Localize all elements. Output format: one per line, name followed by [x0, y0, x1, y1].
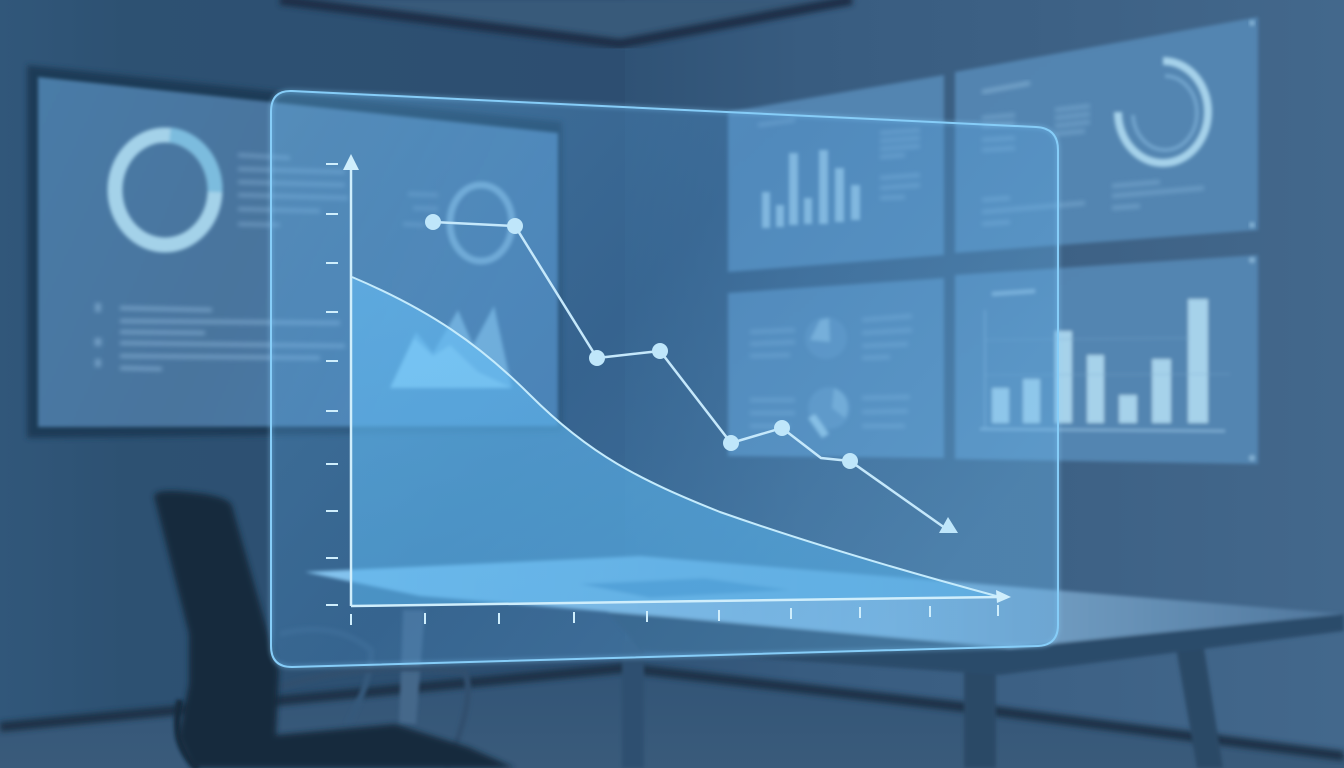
office chair	[154, 491, 515, 768]
right wall screens	[728, 17, 1258, 464]
mountain chart behind panel	[390, 306, 512, 388]
screen: top middle	[728, 75, 944, 272]
text lines upper	[238, 155, 348, 225]
screen: top right	[955, 17, 1258, 253]
donut chart	[115, 135, 215, 245]
text lines lower	[98, 303, 345, 369]
area under curve	[352, 277, 1000, 605]
chart axes	[326, 154, 1011, 625]
left wall screen	[27, 65, 562, 438]
y-axis ticks	[326, 164, 338, 605]
area curve line	[352, 277, 1000, 597]
small text behind panel	[403, 194, 438, 225]
small donut behind panel	[450, 185, 512, 261]
screen: bottom right bar chart	[955, 255, 1258, 464]
panel glass	[271, 91, 1058, 667]
glass chart panel	[271, 91, 1058, 667]
table legs	[399, 610, 1223, 768]
screen: bottom middle	[728, 278, 944, 458]
panel outer glow	[271, 91, 1058, 667]
line arrowhead	[939, 517, 958, 533]
declining line series	[425, 214, 958, 533]
meeting table	[305, 556, 1344, 768]
x-axis ticks	[351, 605, 998, 625]
